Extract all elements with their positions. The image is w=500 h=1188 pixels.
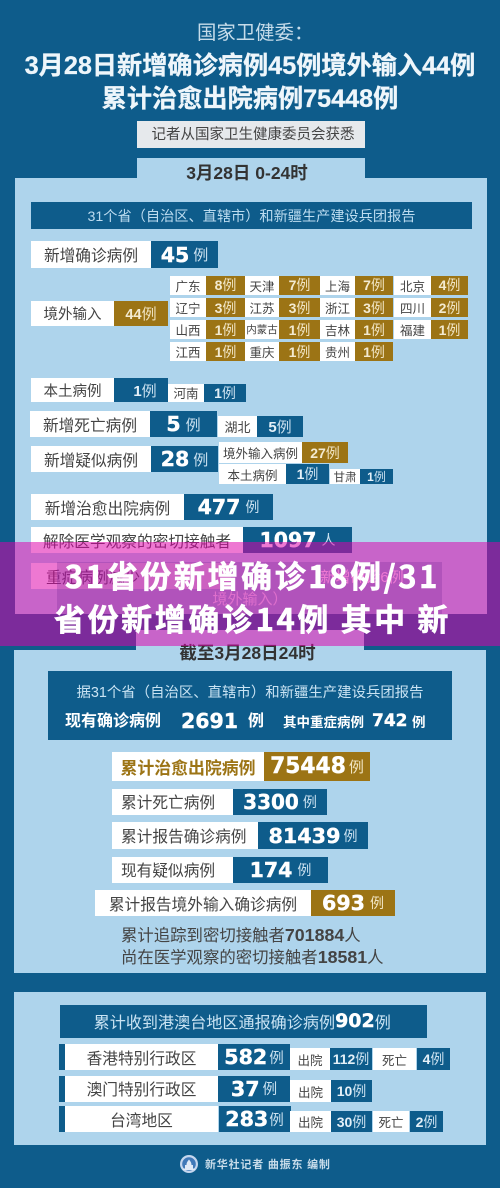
cell: Jilin: 1例 <box>363 322 385 338</box>
banner: reporting source <box>31 202 472 229</box>
current confirmed value: 2691 <box>181 709 238 733</box>
province: Gansu <box>330 469 360 484</box>
cell: Shanghai <box>320 276 393 295</box>
breakdown: local label <box>219 464 286 484</box>
banner: partly hidden note <box>57 562 442 614</box>
discharged value: 30例 <box>337 1114 366 1130</box>
value <box>150 411 217 437</box>
panel heading: date: 3月28日 0-24时 <box>186 163 308 183</box>
value <box>233 788 327 815</box>
breakdown: local value <box>286 464 329 484</box>
cell: Jiangsu: 3例 <box>289 300 310 316</box>
label: 境外输入 <box>44 307 102 323</box>
value: 例 <box>349 759 364 776</box>
deaths value: 2例 <box>416 1114 437 1130</box>
source note: 记者从国家卫生健康委员会获悉 <box>152 127 355 143</box>
value: 75448 <box>270 754 346 779</box>
label: 本土病例 <box>44 384 102 400</box>
icon: Xinhua logo <box>180 1155 198 1173</box>
value: 1097 <box>259 528 317 552</box>
province value <box>257 416 303 437</box>
cell: Beijing: 4例 <box>439 277 460 293</box>
note text: 新增确诊6例 <box>320 569 404 586</box>
label <box>31 378 114 402</box>
panel heading <box>60 1005 427 1038</box>
cell: Zhejiang: 浙江 <box>325 302 350 316</box>
discharged value <box>330 1048 372 1070</box>
row: new deaths <box>30 411 303 437</box>
row: newly discharged <box>31 494 273 520</box>
value: 45 <box>161 242 189 266</box>
discharged label: 出院 <box>297 1054 322 1068</box>
province: Hubei <box>218 416 257 437</box>
cell: Jilin <box>320 320 393 339</box>
value <box>114 378 168 402</box>
label <box>31 446 151 472</box>
row: cumulative imported <box>95 890 395 916</box>
province value: 1例 <box>214 385 236 401</box>
cell: Fujian: 1例 <box>439 322 460 338</box>
value <box>114 301 168 326</box>
credit: 新华社记者 曲振东 编制 <box>205 1159 331 1171</box>
label: 累计报告境外输入确诊病例 <box>109 896 297 914</box>
value: 例 <box>245 499 259 515</box>
label: 累计报告确诊病例 <box>121 829 246 846</box>
cell: Jiangxi <box>170 342 245 361</box>
breakdown: imported label: 境外输入病例 <box>223 447 298 461</box>
label <box>31 494 184 520</box>
discharged value: 10例 <box>337 1083 366 1099</box>
reporting source: 据31个省（自治区、直辖市）和新疆生产建设兵团报告 <box>76 681 424 702</box>
label: 累计死亡病例 <box>121 795 215 812</box>
province: Henan <box>168 384 204 402</box>
panel: daily figures <box>15 158 487 614</box>
panel background: body <box>14 650 486 973</box>
breakdown: imported value: 27例 <box>310 444 340 460</box>
cell: Zhejiang: 3例 <box>363 300 385 316</box>
panel background: tab <box>136 630 364 651</box>
grid: imported cases by province <box>170 276 468 361</box>
value: 例 <box>303 794 317 810</box>
value: 例 <box>193 247 208 264</box>
cell: Guangdong: 8例 <box>215 277 236 293</box>
row: cumulative deaths <box>112 789 327 815</box>
cell: Liaoning: 3例 <box>215 300 236 316</box>
label <box>31 563 231 589</box>
province: Henan: 河南 <box>173 387 198 401</box>
value: 81439 <box>268 824 340 848</box>
cell: Zhejiang <box>320 298 393 317</box>
value <box>151 446 218 472</box>
discharged label <box>290 1048 330 1070</box>
current confirmed label: 现有确诊病例 <box>65 713 161 730</box>
discharged label <box>290 1080 331 1102</box>
value <box>258 822 368 849</box>
row: cumulative confirmed <box>112 822 368 849</box>
source note <box>137 121 365 148</box>
discharged value: 112例 <box>333 1051 369 1067</box>
overlay banner: headline strip <box>0 542 500 646</box>
cell: Guizhou <box>320 342 393 361</box>
label: 重症病例减少 <box>46 570 140 586</box>
value <box>151 241 218 268</box>
label: 澳门特别行政区 <box>87 1082 196 1099</box>
label <box>65 1106 218 1132</box>
banner: reporting source: 31个省（自治区、直辖市）和新疆生产建设兵团报告 <box>88 206 415 226</box>
value: 例 <box>269 1050 284 1066</box>
row: imported <box>31 301 168 326</box>
severe label: 其中重症病例 <box>283 715 364 730</box>
value: 例 <box>186 416 201 434</box>
value <box>233 856 328 883</box>
deaths label: 死亡 <box>382 1054 407 1068</box>
text: contacts under observation: 尚在医学观察的密切接触者18581人 <box>121 946 384 966</box>
cell: Sichuan: 2例 <box>439 300 460 316</box>
value <box>243 527 352 553</box>
province value: 5例 <box>268 419 292 436</box>
deaths label <box>373 1048 416 1070</box>
cell: Shanghai: 上海 <box>325 280 350 294</box>
panel background: tab <box>137 158 365 179</box>
breakdown: local label: 本土病例 <box>227 468 278 482</box>
cell: Chongqing <box>245 342 320 361</box>
label <box>112 822 258 849</box>
row: Hong Kong <box>59 1044 450 1070</box>
label: 新增确诊病例 <box>44 248 138 265</box>
value: 283 <box>225 1107 268 1131</box>
cell: Fujian: 福建 <box>400 324 425 338</box>
row: cumulative discharged <box>112 752 370 781</box>
severe value: 742 <box>372 711 408 731</box>
cell: Jilin: 吉林 <box>325 324 350 338</box>
cell: Liaoning <box>170 298 245 317</box>
value: 例 <box>297 862 311 878</box>
cell: Shanxi: 1例 <box>215 322 236 338</box>
cell: Inner Mongolia: 1例 <box>289 322 310 338</box>
discharged label <box>290 1111 331 1132</box>
label <box>31 301 114 326</box>
label <box>112 788 233 815</box>
value <box>264 752 370 781</box>
box: current confirmed <box>48 671 452 740</box>
label: 新增死亡病例 <box>43 418 137 434</box>
value: 例 <box>193 452 208 468</box>
label <box>65 1044 218 1070</box>
label <box>65 1076 218 1102</box>
label <box>31 241 151 268</box>
title: agency: 国家卫健委： <box>197 16 313 45</box>
row: current suspected <box>112 857 328 883</box>
title: headline <box>25 52 475 112</box>
cell: Sichuan <box>394 298 468 317</box>
label: 累计治愈出院病例 <box>120 759 256 778</box>
value: 1例 <box>133 382 157 400</box>
label <box>30 411 150 437</box>
text: contacts traced: 累计追踪到密切接触者701884人 <box>121 924 361 944</box>
cell: Chongqing: 1例 <box>289 344 310 360</box>
unit: 例 <box>248 713 264 730</box>
cell: Beijing <box>394 276 468 295</box>
value: 例 <box>263 1082 277 1098</box>
value <box>218 1076 290 1102</box>
discharged label: 出院 <box>298 1086 323 1100</box>
cell: Jiangsu <box>245 298 320 317</box>
label: 解除医学观察的密切接触者 <box>43 534 231 550</box>
label: 台湾地区 <box>110 1112 173 1130</box>
value: 174 <box>250 858 292 882</box>
cell: Shanghai: 7例 <box>363 277 385 293</box>
deaths label: 死亡 <box>378 1116 404 1130</box>
value: 5 <box>166 412 181 436</box>
cell: Tianjin <box>245 276 320 295</box>
province value <box>204 384 246 402</box>
deaths value <box>410 1111 443 1132</box>
value: 例 <box>269 1112 284 1128</box>
label <box>31 527 243 553</box>
cell: Tianjin: 天津 <box>249 280 274 294</box>
cell: Jiangsu: 江苏 <box>249 302 274 316</box>
value <box>311 890 395 916</box>
marker <box>59 1076 65 1102</box>
label: 新增治愈出院病例 <box>45 500 170 518</box>
value: 人 <box>322 532 336 548</box>
note text: second line: 境外输入） <box>212 591 288 608</box>
cell: Fujian <box>394 320 468 339</box>
label <box>95 890 311 916</box>
value: 693 <box>322 891 365 915</box>
panel heading: 累计收到港澳台地区通报确诊病例 例 <box>94 1014 391 1032</box>
breakdown: imported value <box>302 442 348 463</box>
value: 477 <box>198 495 240 519</box>
label <box>112 856 233 883</box>
cell: Chongqing: 重庆 <box>249 346 274 360</box>
cell: Guizhou: 1例 <box>363 344 385 360</box>
deaths value <box>417 1048 450 1070</box>
panel heading: date: 截至3月28日24时 <box>179 642 316 662</box>
discharged value <box>331 1080 372 1102</box>
cell: Tianjin: 7例 <box>289 277 310 293</box>
cell: Inner Mongolia: 内蒙古 <box>246 324 278 336</box>
label: 新增疑似病例 <box>44 452 138 470</box>
value: 28 <box>161 447 189 471</box>
title: headline: 累计治愈出院病例75448例 <box>102 84 398 112</box>
cell: Shanxi: 山西 <box>175 324 200 338</box>
value: 582 <box>224 1045 267 1069</box>
title: headline: 3月28日新增确诊病例45例境外输入44例 <box>25 52 475 80</box>
value: 44例 <box>125 306 157 323</box>
deaths value: 4例 <box>423 1051 444 1067</box>
discharged label: 出院 <box>298 1116 323 1130</box>
value: 3300 <box>243 790 299 814</box>
value <box>218 1106 290 1132</box>
cell: Guangdong: 广东 <box>175 280 200 294</box>
cell: Shanxi <box>170 320 245 339</box>
row: new suspected <box>31 442 393 484</box>
value: 37 <box>231 1077 260 1101</box>
overlay headline: first line: 31省份新增确诊18例/31 <box>65 552 440 597</box>
cell: Beijing: 北京 <box>400 280 425 294</box>
province value: 1例 <box>367 470 386 484</box>
marker <box>59 1044 65 1070</box>
row: local cases <box>31 378 246 402</box>
panel: cumulative figures <box>14 630 486 973</box>
cell: Inner Mongolia <box>245 320 320 339</box>
label: 现有疑似病例 <box>121 863 215 880</box>
row: Macao <box>59 1076 372 1102</box>
province value <box>360 469 393 484</box>
row: released contacts <box>31 527 352 553</box>
value: 例 <box>343 828 357 844</box>
value <box>184 494 273 520</box>
discharged value <box>331 1111 372 1132</box>
unit: 例 <box>412 715 426 730</box>
overlay headline: second line: 省份新增确诊14例 其中 新 <box>54 595 451 640</box>
panel: Hong Kong, Macao, Taiwan <box>14 992 486 1145</box>
cell: Guizhou: 贵州 <box>325 346 350 360</box>
cell: Sichuan: 四川 <box>400 302 425 316</box>
label: 香港特别行政区 <box>87 1050 196 1068</box>
province: Hubei: 湖北 <box>224 420 250 435</box>
label <box>112 752 264 781</box>
cell: Liaoning: 辽宁 <box>175 302 200 316</box>
marker <box>59 1106 65 1132</box>
cell: Jiangxi: 1例 <box>215 344 236 360</box>
cell: Jiangxi: 江西 <box>175 346 200 360</box>
breakdown: local value: 1例 <box>297 466 318 482</box>
value <box>218 1044 290 1070</box>
row: new confirmed <box>31 241 218 268</box>
cell: Guangdong <box>170 276 245 295</box>
breakdown: imported label <box>219 442 302 463</box>
province: Gansu: 甘肃 <box>334 472 356 484</box>
panel background: body <box>15 178 487 614</box>
deaths label <box>373 1111 409 1132</box>
value: 例 <box>370 895 384 911</box>
row: Taiwan <box>59 1106 443 1132</box>
panel heading: 902 <box>335 1010 375 1032</box>
